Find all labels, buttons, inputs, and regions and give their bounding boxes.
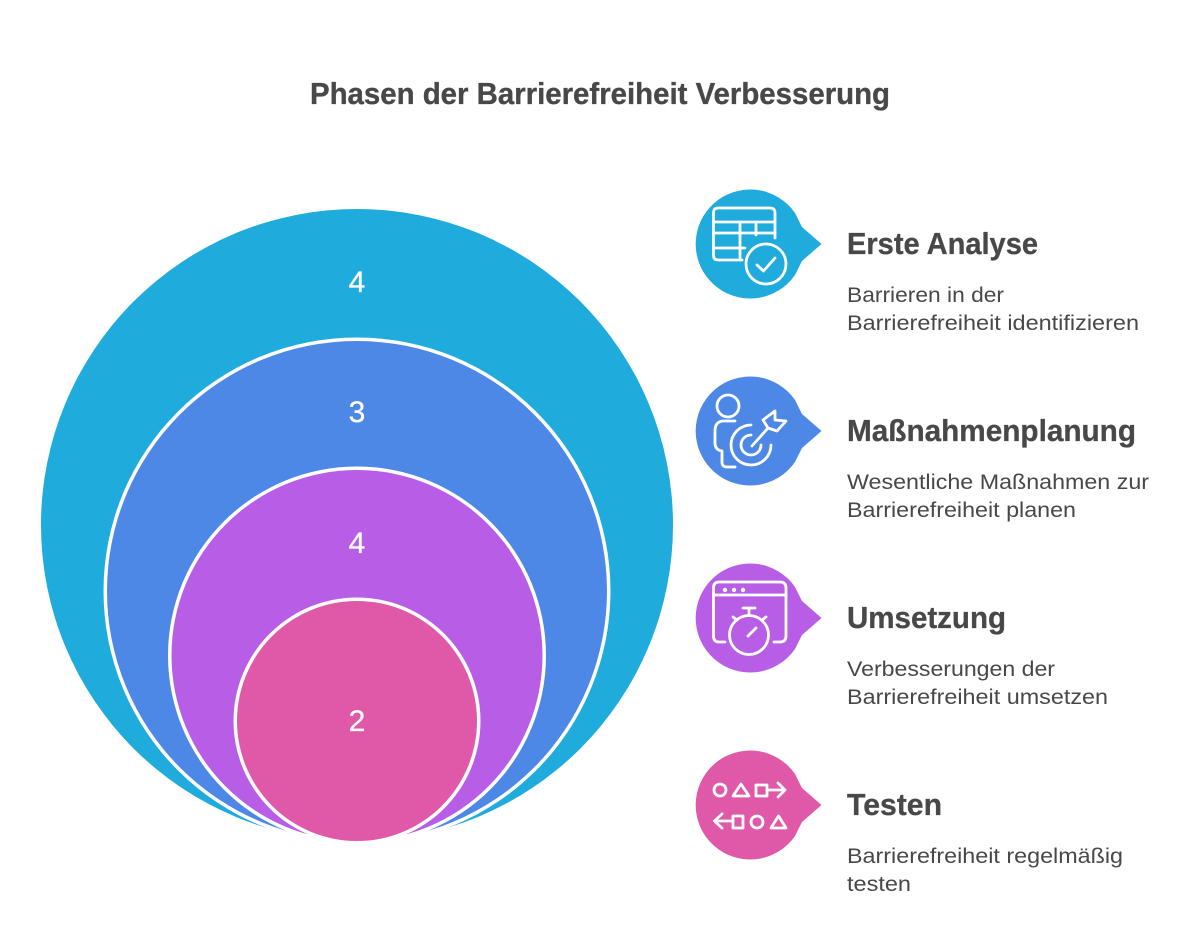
item: Testen: [696, 750, 1123, 896]
description: [847, 844, 1123, 896]
description: [847, 283, 1139, 335]
description: [847, 657, 1108, 709]
circle: phase 2: 3: [349, 396, 365, 429]
description: Barrierefreiheit umsetzen: [847, 685, 1108, 709]
bubble: teal: [696, 189, 822, 298]
icon: table with check mark: [714, 208, 786, 284]
icon: shapes and arrows: [714, 783, 786, 828]
item: Erste Analyse: [696, 189, 1139, 335]
nested circle chart: [41, 209, 673, 844]
title: Phasen der Barrierefreiheit Verbesserung: [310, 77, 890, 111]
bubble: blue: [696, 376, 822, 486]
description: testen: [847, 872, 911, 896]
heading: Maßnahmenplanung: [847, 414, 1136, 448]
bubble: pink: [696, 750, 822, 859]
description: Verbesserungen der: [847, 657, 1055, 681]
icon: person with target: [715, 395, 786, 467]
description: Wesentliche Maßnahmen zur: [847, 470, 1149, 494]
item: Umsetzung: [696, 564, 1108, 709]
description: Barrierefreiheit regelmäßig: [847, 844, 1123, 868]
description: Barrieren in der: [847, 283, 1004, 307]
icon: browser window with stopwatch: [714, 582, 786, 654]
description: Barrierefreiheit identifizieren: [847, 311, 1139, 335]
circle: phase 3: [168, 466, 546, 844]
circle: phase 4: 2: [349, 705, 365, 738]
description: Barrierefreiheit planen: [847, 498, 1076, 522]
description: [847, 470, 1149, 522]
circle: phase 2: [104, 338, 610, 844]
item: Maßnahmenplanung: [696, 376, 1149, 522]
bubble: purple: [696, 564, 822, 672]
heading: Erste Analyse: [847, 227, 1038, 261]
heading: Umsetzung: [847, 601, 1006, 635]
circle: phase 3: 4: [349, 527, 365, 560]
heading: Testen: [847, 788, 942, 822]
circle: phase 4: [234, 598, 480, 844]
circle: phase 1: 4: [349, 266, 365, 299]
